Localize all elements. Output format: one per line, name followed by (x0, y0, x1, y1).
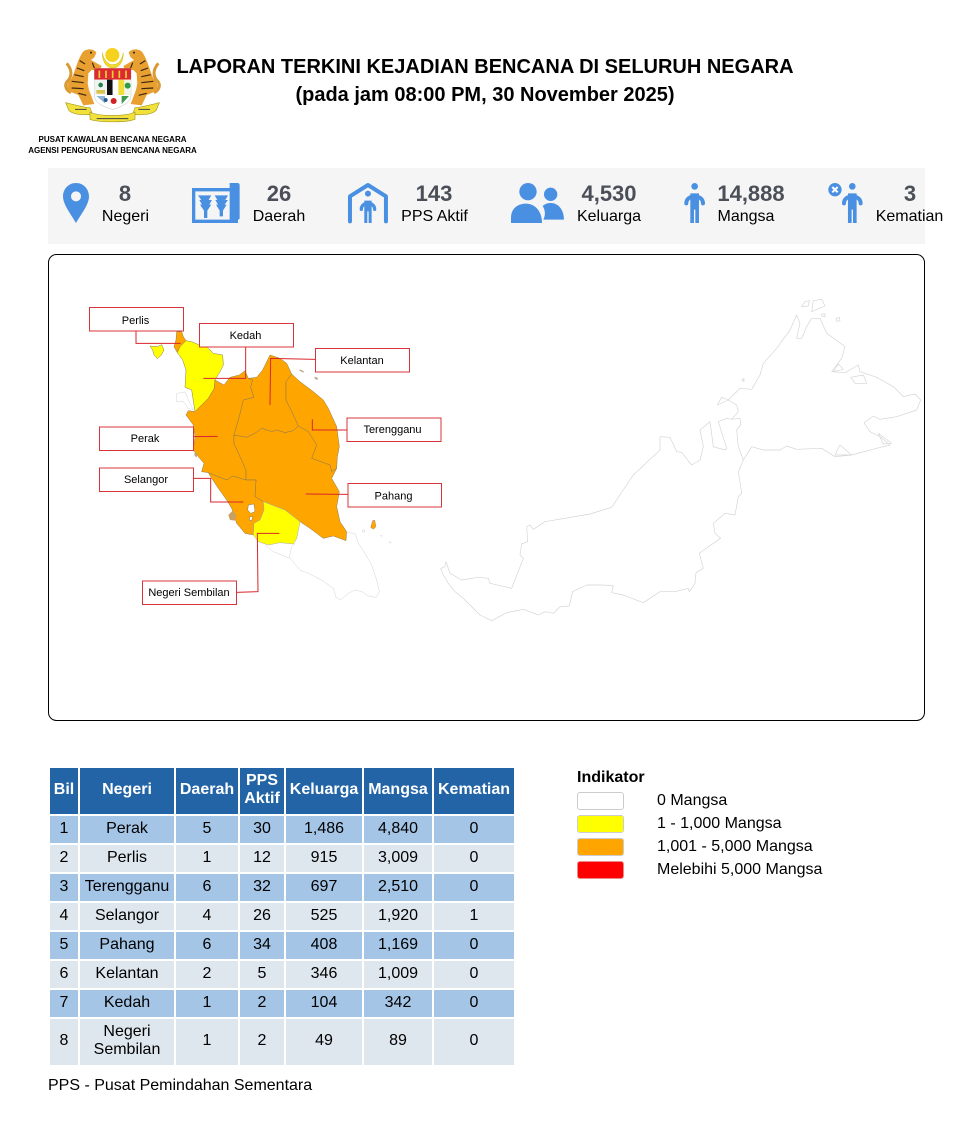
data table: Aktif (244, 790, 280, 807)
data table: 2,510 (378, 878, 418, 894)
data table: 34 (253, 936, 271, 952)
stat: kematian (828, 181, 943, 225)
data table: Daerah (180, 781, 234, 798)
data table: 26 (253, 906, 271, 924)
state: perlis (174, 332, 186, 353)
title: (pada jam 08:00 PM, 30 November 2025) (295, 84, 675, 106)
crescent and star (102, 48, 123, 68)
data table: 3 (60, 878, 68, 894)
label: selangor (100, 468, 194, 492)
agency name: AGENSI PENGURUSAN BENCANA NEGARA (28, 146, 197, 155)
shield (94, 68, 131, 109)
data table: 0 (470, 964, 478, 982)
stat: negeri: Negeri (102, 208, 149, 225)
island: pangkor area (228, 511, 237, 521)
data table: 0 (470, 1032, 478, 1049)
data table: 5 (203, 820, 211, 836)
data table: Terengganu (85, 878, 169, 894)
data table: 342 (385, 994, 411, 1010)
data table: 6 (203, 936, 211, 952)
sabah (717, 315, 921, 460)
leader lines (136, 331, 348, 592)
state: kelantan (234, 355, 298, 437)
data table: Kematian (438, 781, 510, 798)
state: perak (186, 371, 254, 480)
right tiger (123, 49, 159, 105)
label: pahang: Pahang (375, 490, 412, 502)
stat: pps aktif: PPS Aktif (401, 208, 468, 225)
state: negeri sembilan (253, 502, 300, 545)
data table: 0 (470, 936, 478, 952)
data table: Negeri (102, 781, 152, 798)
data table: 5 (258, 964, 266, 982)
island: langkawi (150, 345, 164, 359)
sabah islands (742, 299, 892, 455)
label: negeri sembilan (142, 581, 236, 604)
data table: 0 (470, 820, 478, 836)
agency name (28, 135, 197, 155)
sarawak (441, 418, 743, 621)
title (176, 56, 794, 106)
label: kelantan: Kelantan (340, 355, 384, 367)
label: negeri sembilan: Negeri Sembilan (148, 587, 230, 599)
stat: negeri: 8 (119, 181, 131, 206)
panel: summary statistics (48, 168, 943, 244)
data table: Perlis (107, 848, 147, 866)
stat: keluarga: Keluarga (577, 208, 641, 225)
data table: 915 (311, 848, 337, 866)
data table: 1 (203, 848, 211, 866)
data table: 0 (470, 878, 478, 894)
stat: mangsa (686, 181, 785, 225)
data table: 346 (311, 964, 337, 982)
data table: 1 (203, 994, 211, 1010)
data table: 4 (60, 906, 68, 924)
data table: 89 (389, 1032, 407, 1049)
data table: 6 (60, 964, 68, 982)
data table: Bil (54, 781, 74, 798)
stat: mangsa: 14,888 (717, 181, 785, 206)
data table: Kelantan (95, 964, 159, 982)
data table: 32 (253, 878, 271, 894)
legend item: yellow (577, 815, 782, 833)
stat: daerah (192, 181, 305, 225)
data table (50, 768, 514, 1065)
johor and melaka outline (265, 520, 391, 600)
small east islands (194, 369, 318, 457)
stat: kematian: Kematian (876, 208, 943, 225)
stat: daerah: Daerah (253, 208, 305, 225)
data table: Selangor (95, 906, 159, 924)
stat: daerah: 26 (267, 181, 291, 206)
data table: 1,009 (378, 964, 418, 982)
data table: 1,169 (378, 936, 418, 952)
label: perak: Perak (131, 433, 160, 445)
data table: 2 (203, 964, 211, 982)
island: tioman (371, 520, 376, 529)
legend heading: Indikator (577, 769, 645, 786)
icon: national coat of arms (64, 48, 161, 122)
data table: Mangsa (368, 781, 428, 798)
left tiger (66, 49, 102, 105)
data table: Keluarga (290, 781, 358, 798)
legend item: orange: 1,001 - 5,000 Mangsa (657, 838, 813, 855)
footnote: PPS - Pusat Pemindahan Sementara (48, 1077, 312, 1094)
data table: 0 (470, 848, 478, 866)
data table: 1,920 (378, 906, 418, 924)
data table: 8 (60, 1032, 68, 1049)
data table: Perak (106, 820, 148, 836)
scroll (66, 103, 159, 122)
data table: 2 (258, 1032, 266, 1049)
data table: 30 (253, 820, 271, 836)
stat: mangsa: Mangsa (718, 208, 775, 225)
data table: 6 (203, 878, 211, 894)
label: kedah: Kedah (230, 330, 261, 342)
data table: 4,840 (378, 820, 418, 836)
data table: 49 (315, 1032, 333, 1049)
panel: map (48, 254, 925, 721)
data table: 1,486 (304, 820, 344, 836)
data table: 1 (470, 906, 478, 924)
legend item: red: Melebihi 5,000 Mangsa (657, 861, 822, 878)
stat: keluarga: 4,530 (581, 181, 637, 206)
label: perlis: Perlis (122, 315, 150, 327)
data table: Sembilan (94, 1041, 160, 1058)
data table: 5 (60, 936, 68, 952)
label: perak (100, 427, 194, 450)
legend item: orange (577, 838, 813, 856)
state: selangor (208, 473, 264, 535)
data table: 1 (203, 1032, 211, 1049)
state: terengganu (286, 374, 339, 472)
legend item: zero: 0 Mangsa (657, 792, 727, 809)
data table: 408 (311, 936, 337, 952)
data table: Negeri (103, 1023, 151, 1040)
data table: 3,009 (378, 848, 418, 866)
label: pahang (348, 484, 442, 507)
data table: 2 (60, 848, 68, 866)
data table: Pahang (99, 936, 155, 952)
data table: 4 (203, 906, 211, 924)
state: kedah (177, 341, 223, 412)
state: pahang (234, 426, 347, 541)
penang outline (177, 392, 193, 410)
stat: pps aktif: 143 (416, 181, 452, 206)
data table: 7 (60, 994, 68, 1010)
label: kelantan (316, 348, 410, 372)
data table: Kedah (104, 994, 150, 1010)
data table: 104 (311, 994, 337, 1010)
stat: kematian: 3 (904, 181, 916, 206)
data table: 0 (470, 994, 478, 1010)
title: LAPORAN TERKINI KEJADIAN BENCANA DI SELURUH NEGARA (176, 56, 794, 78)
legend item: zero (577, 792, 728, 810)
data table: 1 (60, 820, 68, 836)
label: terengganu: Terengganu (363, 424, 422, 436)
data table: 2 (258, 994, 266, 1010)
data table: PPS (246, 772, 278, 789)
agency name: PUSAT KAWALAN BENCANA NEGARA (38, 135, 186, 144)
data table: 697 (311, 878, 337, 894)
label: perlis (90, 308, 184, 331)
data table: 12 (253, 848, 271, 866)
stat: pps aktif (350, 181, 468, 225)
east malaysia outline (441, 299, 921, 621)
data table: 525 (311, 906, 337, 924)
legend item: yellow: 1 - 1,000 Mangsa (657, 815, 782, 832)
peninsular malaysia states (150, 332, 347, 545)
stat: keluarga (511, 181, 641, 225)
label: terengganu (347, 418, 441, 442)
legend item: red (577, 861, 822, 879)
legend (577, 769, 822, 879)
stat: negeri (63, 181, 149, 225)
label: selangor: Selangor (124, 474, 168, 486)
label: kedah (200, 324, 294, 347)
